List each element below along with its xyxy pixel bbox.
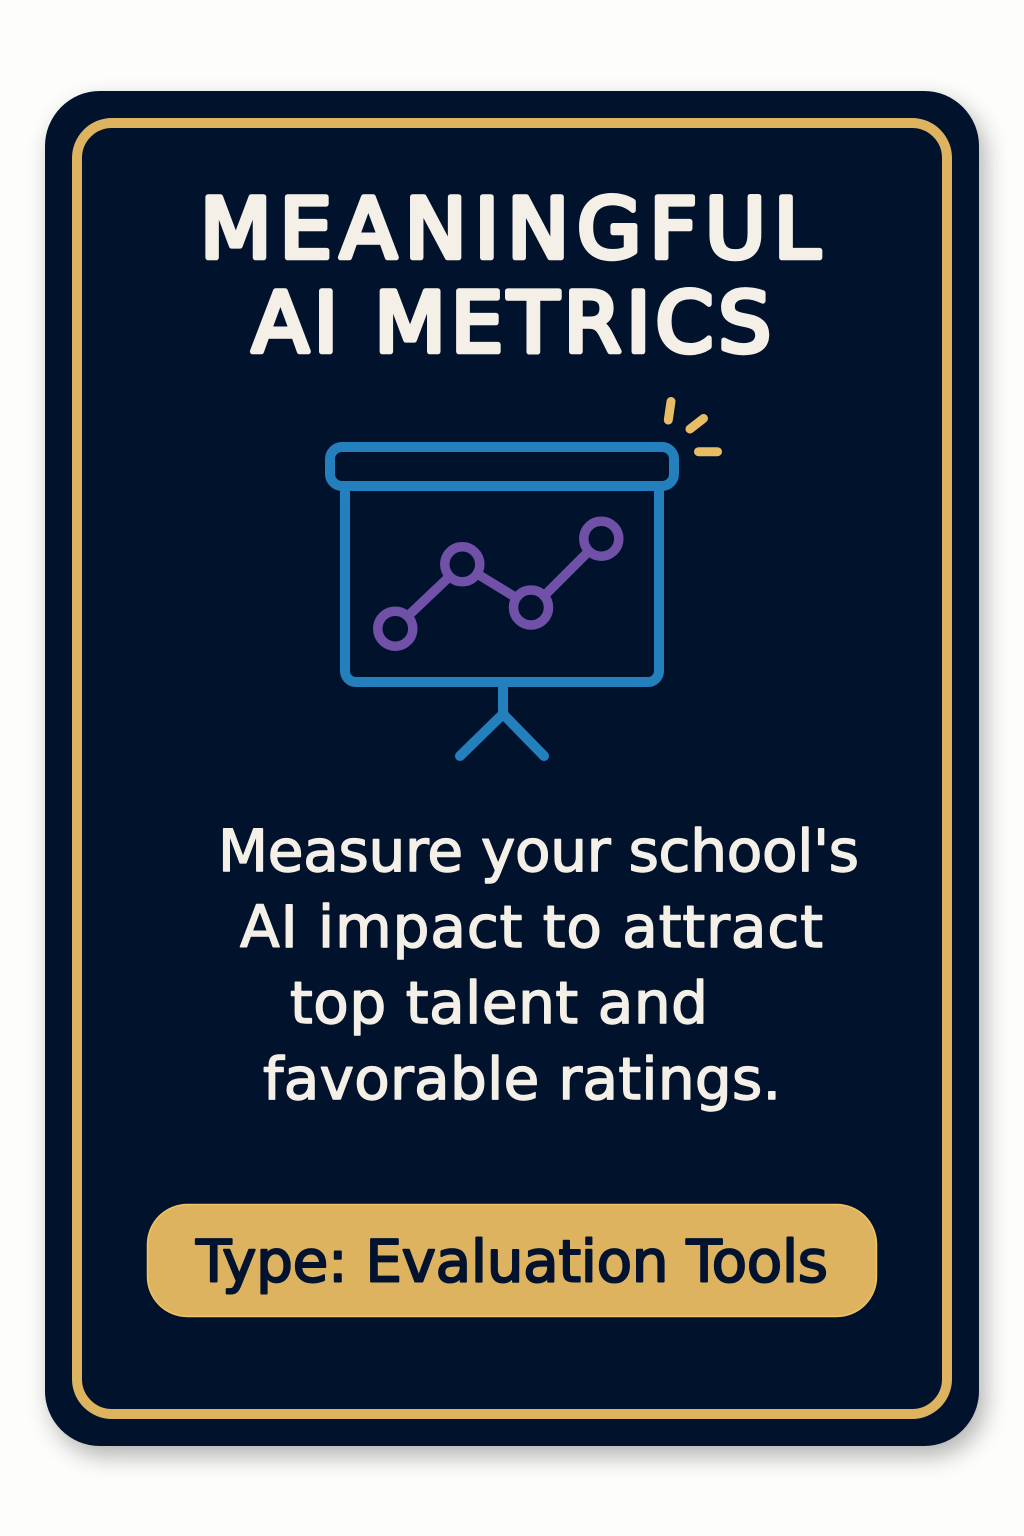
icon: presentation screen with line chart <box>330 402 718 756</box>
description <box>218 817 859 1113</box>
title <box>200 180 820 372</box>
sparkle <box>668 402 718 452</box>
description line 4: favorable ratings. <box>263 1045 781 1113</box>
title line 1: MEANINGFUL <box>200 180 820 278</box>
description line 3: top talent and <box>290 969 708 1037</box>
gold border <box>72 118 952 1419</box>
title line 2: AI METRICS <box>252 274 771 372</box>
badge label: Type: Evaluation Tools <box>195 1228 828 1296</box>
description line 2: AI impact to attract <box>240 893 823 961</box>
type badge <box>148 1204 876 1316</box>
screen <box>330 447 674 756</box>
badge background <box>148 1204 876 1316</box>
chart line <box>378 521 619 646</box>
description line 1: Measure your school's <box>218 817 859 885</box>
